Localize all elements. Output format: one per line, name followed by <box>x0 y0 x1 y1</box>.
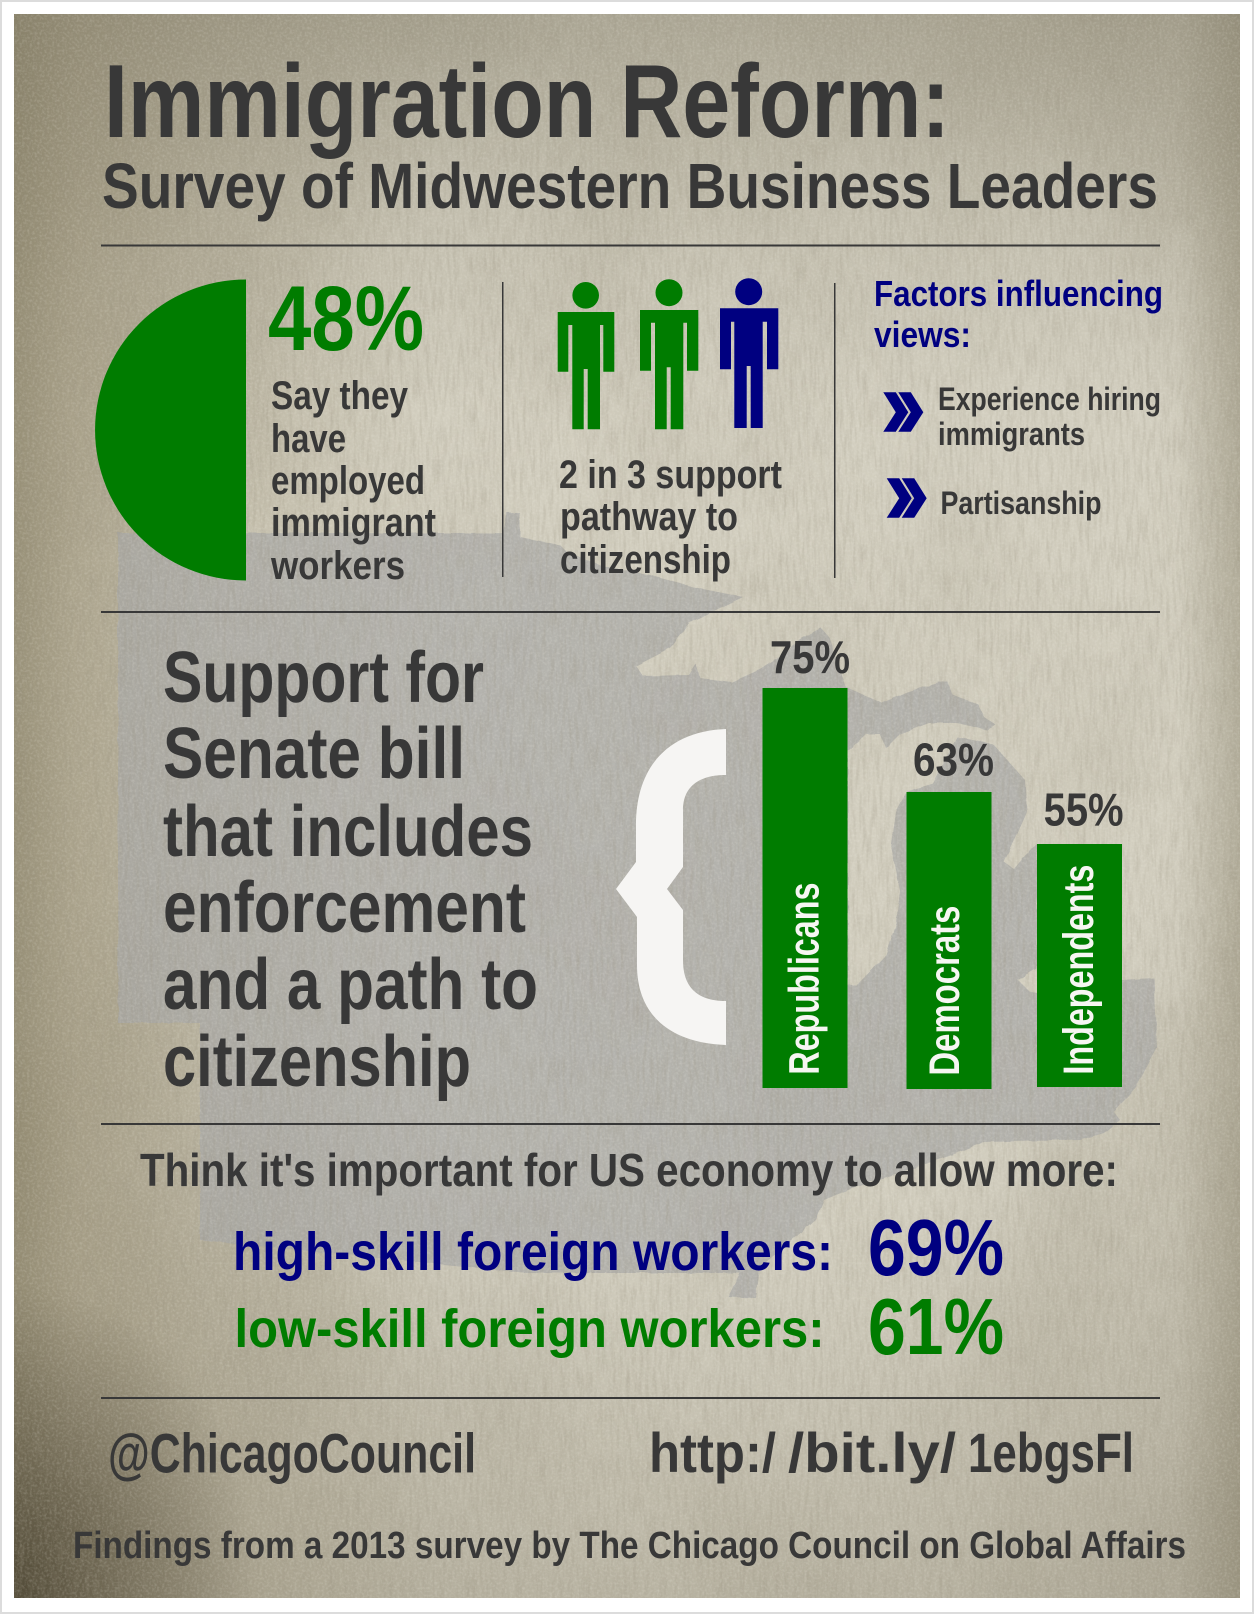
description: immigrant <box>271 501 436 545</box>
heading: views: <box>874 314 971 355</box>
title: Immigration Reform: <box>104 44 950 160</box>
icon: double chevron <box>883 392 923 432</box>
factor: partisanship: Partisanship <box>940 485 1102 521</box>
vertical divider <box>502 282 504 577</box>
heading: enforcement <box>163 868 526 948</box>
divider <box>101 244 1160 246</box>
icon: person green <box>640 279 698 429</box>
bar: Democrats 63%: 63% <box>913 734 994 786</box>
description <box>559 453 782 582</box>
half-circle chart 48% <box>95 280 246 580</box>
icon: person blue <box>720 278 778 428</box>
bar: Independents 55%: Independents <box>1055 865 1103 1075</box>
link: 1ebgsFl <box>968 1421 1134 1484</box>
description: 2 in 3 support <box>559 453 782 497</box>
footer <box>73 1421 1186 1567</box>
divider <box>101 611 1160 613</box>
vertical divider <box>834 283 836 578</box>
description <box>270 374 436 588</box>
heading: Senate bill <box>163 714 465 794</box>
low-skill value: 61% <box>868 1282 1004 1371</box>
icon: curly brace <box>616 729 726 1045</box>
stat 48%: 48% <box>268 268 424 370</box>
bar: Republicans 75%: 75% <box>770 631 850 683</box>
heading <box>163 638 538 1102</box>
bar: Democrats 63%: Democrats <box>921 906 969 1076</box>
description: pathway to <box>560 495 738 539</box>
heading: Support for <box>163 638 484 718</box>
icon: double chevron <box>887 478 927 518</box>
divider <box>101 1397 1160 1399</box>
heading <box>874 273 1163 355</box>
low-skill label: low-skill foreign workers: <box>234 1299 824 1359</box>
heading: Think it's important for US economy to allow more: <box>140 1144 1118 1196</box>
factor: experience hiring immigrants <box>938 381 1161 452</box>
heading: that includes <box>163 792 533 872</box>
factor: experience hiring immigrants: immigrants <box>938 416 1085 452</box>
link <box>649 1421 1134 1484</box>
high-skill value: 69% <box>868 1203 1004 1292</box>
panel: support for Senate bill <box>163 631 1124 1102</box>
description: employed <box>271 459 425 503</box>
title <box>102 44 1158 222</box>
description: have <box>271 417 346 461</box>
heading: citizenship <box>163 1022 471 1102</box>
divider <box>101 1123 1160 1125</box>
bar: Republicans 75% <box>762 631 850 1088</box>
twitter handle: @ChicagoCouncil <box>108 1422 476 1485</box>
icon: person green <box>558 282 614 429</box>
heading: and a path to <box>163 945 538 1025</box>
description: citizenship <box>560 538 731 582</box>
bar chart <box>762 631 1124 1089</box>
bar: Democrats 63% <box>906 734 994 1089</box>
bar: Independents 55%: 55% <box>1044 784 1124 836</box>
panel: importance for US economy <box>140 1144 1118 1371</box>
high-skill label: high-skill foreign workers: <box>233 1222 833 1282</box>
panel: employed immigrant workers <box>95 268 436 588</box>
description: Say they <box>271 374 409 418</box>
bar: Republicans 75%: Republicans <box>781 883 829 1075</box>
link: http:/ <box>649 1421 776 1484</box>
map of the Midwest <box>118 513 1157 1298</box>
bar: Independents 55% <box>1037 784 1124 1087</box>
description: workers <box>270 544 405 588</box>
link: /bit.ly/ <box>788 1421 956 1484</box>
panel: factors influencing views <box>874 273 1163 521</box>
factor: experience hiring immigrants: Experience hiring <box>938 381 1161 417</box>
heading: Factors influencing <box>874 273 1163 314</box>
panel: pathway to citizenship <box>558 278 782 582</box>
